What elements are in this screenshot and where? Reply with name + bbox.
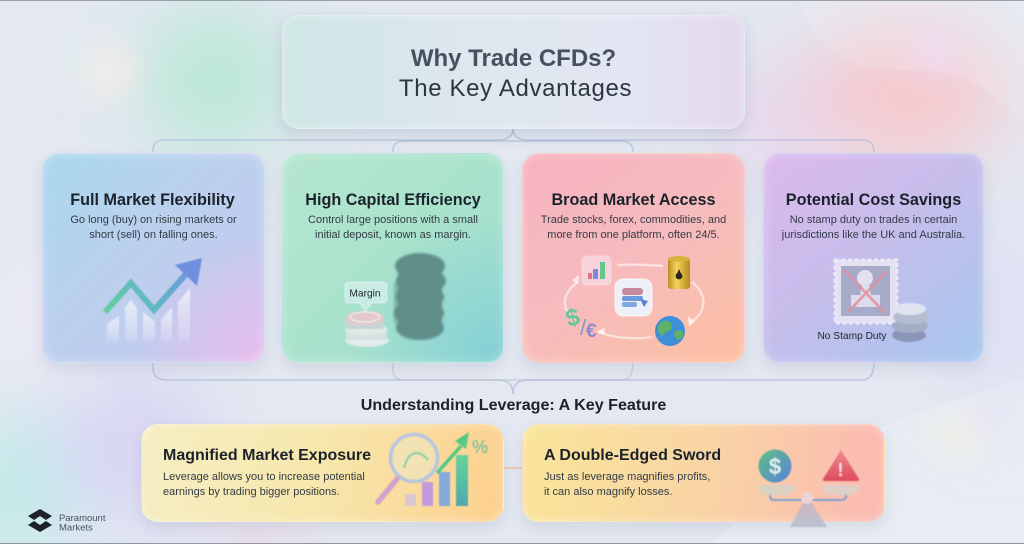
panel: full market flexibility: Full Market Flexibility [70, 191, 235, 209]
small coins [892, 303, 929, 342]
panel: magnified market exposure: earnings by trading bigger positions. [163, 486, 340, 498]
panel: broad market access [522, 153, 745, 363]
panel: high capital efficiency: High Capital Efficiency [305, 191, 481, 209]
panel: magnified market exposure: Magnified Market Exposure [163, 447, 371, 464]
icon: margin coin stacks: Margin [349, 288, 381, 300]
margin callout [345, 282, 387, 311]
large dark coin stack [394, 253, 446, 340]
icon: balance scale [757, 450, 860, 527]
panel: potential cost savings: Potential Cost Savings [786, 191, 961, 209]
panel: broad market access: more from one platform, often 24/5. [547, 228, 720, 240]
panel: double-edged sword: it can also magnify losses. [544, 486, 672, 498]
title panel [282, 15, 745, 129]
panel: magnified market exposure: Leverage allows you to increase potential [163, 471, 365, 483]
heading: understanding leverage: Understanding Leverage: A Key Feature [361, 396, 666, 414]
logo: paramount markets: Markets [59, 522, 93, 534]
globe [655, 316, 685, 346]
panel: full market flexibility: Go long (buy) on rising markets or [70, 214, 237, 226]
icon: rising chart [105, 258, 202, 341]
icon: margin coin stacks [345, 253, 446, 347]
icon: magnifier and bars: % [472, 437, 488, 457]
panel: double-edged sword: A Double-Edged Sword [544, 447, 721, 464]
platform tile [615, 279, 652, 316]
icon: balance scale: $ [769, 454, 781, 479]
soft glow spots [72, 28, 998, 453]
panel: broad market access: Trade stocks, forex, commodities, and [541, 214, 726, 226]
icon: balance scale: ! [838, 460, 844, 480]
logo: paramount markets [28, 509, 106, 534]
icon: market access cycle: € [586, 321, 597, 342]
stock tile [582, 256, 611, 285]
panel: potential cost savings: No stamp duty on trades in certain [790, 214, 957, 226]
icon: market access cycle [563, 256, 703, 346]
panel: magnified market exposure [141, 424, 504, 522]
title text: The Key Advantages [399, 75, 632, 102]
title text [399, 45, 632, 102]
panel: full market flexibility [42, 153, 265, 363]
panel: broad market access: Broad Market Access [551, 191, 716, 209]
panel: full market flexibility: short (sell) on falling ones. [89, 228, 218, 240]
small coin stack [345, 311, 389, 347]
icon: magnifier and bars [378, 432, 488, 506]
panel: double-edged sword [522, 424, 885, 522]
icon: market access cycle: / [580, 315, 587, 340]
currency symbols: $ [563, 303, 583, 333]
logo: paramount markets: Paramount [59, 513, 106, 524]
title text: Why Trade CFDs? [411, 45, 616, 72]
panel: potential cost savings [763, 153, 984, 363]
panel: high capital efficiency [282, 153, 504, 363]
panel: double-edged sword: Just as leverage magnifies profits, [544, 471, 710, 483]
icon: no stamp duty: No Stamp Duty [817, 331, 887, 342]
panel: high capital efficiency: Control large positions with a small [308, 214, 478, 226]
oil barrel [668, 258, 690, 289]
panel: high capital efficiency: initial deposit, known as margin. [315, 228, 471, 240]
panel: potential cost savings: jurisdictions like the UK and Australia. [782, 228, 965, 240]
icon: no stamp duty [817, 260, 929, 342]
